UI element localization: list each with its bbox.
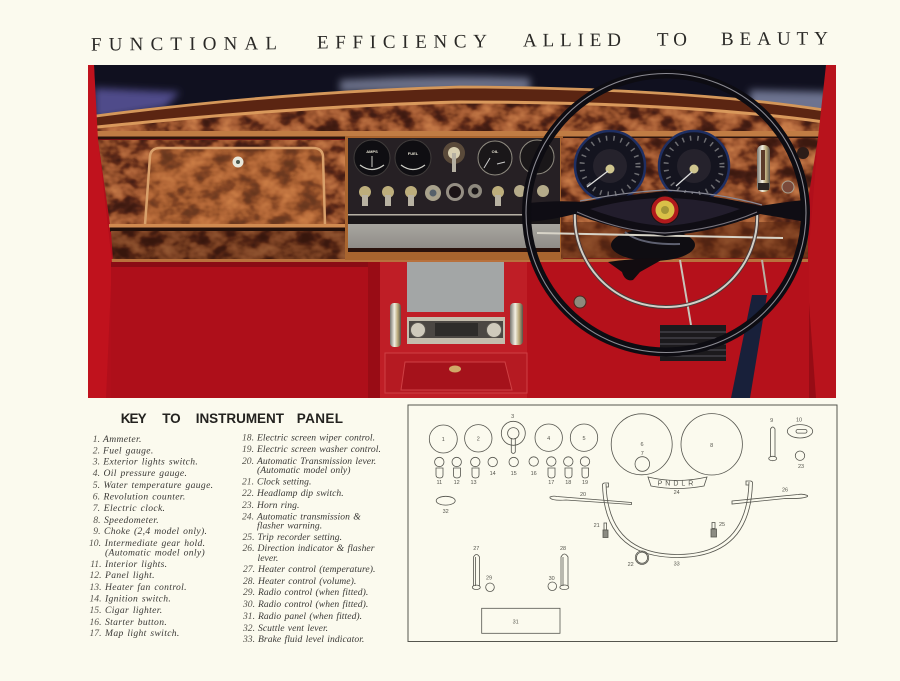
key list: column two: flasher warning. xyxy=(257,520,322,532)
lower dark gap xyxy=(110,228,348,232)
key list: column one: 6. xyxy=(93,492,100,502)
diagram numbers: 6 xyxy=(640,442,644,448)
radio knob 29 xyxy=(486,583,494,592)
key list: column two: Horn ring. xyxy=(256,500,299,511)
trip setting xyxy=(711,522,716,537)
key list: column one: Electric clock. xyxy=(103,503,165,514)
diagram numbers: 4 xyxy=(547,436,550,442)
key list: column one: 17. xyxy=(90,628,102,639)
right carpet xyxy=(800,263,809,398)
small gauges: FUEL xyxy=(408,151,419,156)
headlamp dip switch 22 xyxy=(635,551,649,564)
key heading: PANEL xyxy=(297,411,343,426)
key list: column one: Oil pressure gauge. xyxy=(104,468,187,479)
key list: column one: 14. xyxy=(90,594,102,604)
key list: column two: 27. xyxy=(243,564,255,575)
diagram numbers: 23 xyxy=(798,464,804,470)
key list: column two: Heater control (volume). xyxy=(257,576,356,587)
key list: column two: 21. xyxy=(242,476,254,488)
key list: column two: Clock setting. xyxy=(257,476,311,488)
key list: column one: Speedometer. xyxy=(104,515,159,526)
diagram numbers xyxy=(436,414,804,626)
small gauges: AMPS xyxy=(366,149,378,154)
valance shadow xyxy=(348,248,560,252)
key list: column one: Interior lights. xyxy=(104,559,167,570)
key list: column one: 10. xyxy=(89,538,101,549)
title: EFFICIENCY xyxy=(317,31,487,53)
key list: column one: 11. xyxy=(90,559,102,570)
upper wood band xyxy=(96,88,821,126)
revolution counter xyxy=(575,131,645,201)
clock setting 21 xyxy=(603,523,608,538)
key list: column two: 28. xyxy=(243,576,255,587)
key list: column one: 1. xyxy=(93,434,100,445)
lever 20 xyxy=(550,496,632,504)
title: TO xyxy=(657,29,687,51)
diagram numbers: 25 xyxy=(719,522,725,528)
key list: column two: Headlamp dip switch. xyxy=(256,488,344,499)
key list: column two: Direction indicator & flasher xyxy=(256,543,375,554)
transmission indicator 24: PNDLR xyxy=(658,480,696,488)
diagram numbers: 10 xyxy=(796,418,802,424)
key list: column two: 20. xyxy=(242,456,254,467)
glove box lock xyxy=(232,156,244,168)
diagram numbers: 28 xyxy=(560,546,566,552)
lower right wood xyxy=(561,222,808,259)
radio panel 31 xyxy=(482,608,560,633)
radio xyxy=(407,317,505,344)
indicator stalks xyxy=(537,233,783,238)
key list: column two: Electric screen wiper control. xyxy=(256,432,375,444)
speedometer xyxy=(659,131,729,201)
instrument frame xyxy=(345,136,563,260)
key list: column one: 2. xyxy=(93,446,100,456)
key list: column one: Revolution counter. xyxy=(102,492,186,502)
key list: column two: 32. xyxy=(242,623,255,634)
key list: column two: 25. xyxy=(242,532,254,543)
rail shadow xyxy=(97,136,820,140)
diagram numbers: 33 xyxy=(674,562,680,568)
key list: column one: 9. xyxy=(93,526,100,537)
diagram numbers: 14 xyxy=(490,471,496,477)
key list: column two: Radio control (when fitted). xyxy=(257,587,368,598)
diagram numbers: 5 xyxy=(582,436,586,442)
diagram numbers: 13 xyxy=(470,480,477,486)
key list: column one: Ignition switch. xyxy=(104,594,171,604)
transmission indicator 24 xyxy=(648,477,707,488)
small gauges: OIL xyxy=(492,149,499,154)
small gauges xyxy=(354,140,554,176)
glove box door xyxy=(145,146,327,226)
diagram numbers: 11 xyxy=(436,480,442,486)
pedal stem right xyxy=(762,260,767,293)
key heading: INSTRUMENT xyxy=(196,411,285,426)
key heading: TO xyxy=(162,411,181,426)
steering column xyxy=(608,229,695,280)
key list: column two: Electric screen washer control. xyxy=(256,444,381,455)
knob 25 xyxy=(795,451,805,460)
silver valance xyxy=(348,224,560,248)
key list: column two: Trip recorder setting. xyxy=(258,532,342,543)
radio knob 30 xyxy=(548,582,557,591)
key list: column two: 19. xyxy=(242,444,254,455)
key list: column one: 12. xyxy=(90,570,102,581)
key list: column one: Choke (2,4 model only). xyxy=(104,526,207,537)
instrument black panel xyxy=(348,138,560,216)
diagram numbers: 24 xyxy=(674,490,680,496)
diagram numbers: 9 xyxy=(770,418,773,424)
diagram numbers: 15 xyxy=(511,471,517,477)
lower wood strip xyxy=(109,224,347,228)
revolution counter, clock and speedometer dials xyxy=(611,414,742,475)
key list: column one: 4. xyxy=(93,468,100,479)
diagram numbers: 32 xyxy=(443,509,449,515)
lever 9 xyxy=(769,427,777,461)
carpet dark edge xyxy=(368,262,380,398)
key list: column one: 7. xyxy=(93,503,100,514)
knob 10 xyxy=(787,425,813,438)
right dash knob xyxy=(797,147,809,159)
diagram numbers: 8 xyxy=(710,443,713,449)
diagram numbers: 2 xyxy=(477,436,480,442)
key list: column one: 3. xyxy=(92,456,100,468)
diagram numbers: 20 xyxy=(580,492,586,498)
diagram numbers: 16 xyxy=(531,471,537,477)
key list: column one: Starter button. xyxy=(105,617,167,628)
key list: column two xyxy=(242,432,381,645)
title: FUNCTIONAL xyxy=(91,33,277,56)
key list: column two: Automatic transmission & xyxy=(256,512,361,522)
lower burl panel xyxy=(111,231,345,259)
wheel spokes and hub xyxy=(528,190,806,236)
heater lever 27 xyxy=(472,554,480,590)
diagram numbers: 3 xyxy=(511,414,514,420)
diagram numbers: 1 xyxy=(442,437,445,443)
diagram numbers: 26 xyxy=(782,488,788,494)
pedal stem left xyxy=(680,260,691,325)
console drawer xyxy=(385,353,527,393)
scuttle vent lever 32 xyxy=(436,496,455,505)
key list: column one: 8. xyxy=(93,515,100,526)
key list: column two: (Automatic model only) xyxy=(257,465,351,476)
title: BEAUTY xyxy=(721,28,828,50)
diagram numbers: 12 xyxy=(454,480,460,486)
steering wheel rim xyxy=(526,74,806,352)
diagram numbers: 22 xyxy=(628,562,634,568)
key list: column two: 29. xyxy=(243,587,255,598)
key list: column one: Map light switch. xyxy=(104,628,180,639)
console silver panel xyxy=(407,262,504,312)
key list: column two: Radio panel (when fitted). xyxy=(257,611,362,622)
chrome line xyxy=(348,214,522,216)
key list: column one: (Automatic model only) xyxy=(105,548,205,558)
key list: column two: 24. xyxy=(242,512,254,522)
upper wood light strip xyxy=(96,87,824,116)
key list: column one: 13. xyxy=(90,582,102,593)
floor button xyxy=(574,296,586,308)
diagram numbers: 18 xyxy=(565,480,571,486)
burl band xyxy=(98,104,820,131)
key list: column two: Radio control (when fitted). xyxy=(257,599,368,610)
diagram frame xyxy=(408,405,837,642)
right vent lever xyxy=(510,303,523,345)
switch row xyxy=(359,183,549,206)
windscreen xyxy=(94,65,826,114)
key list: column one: Panel light. xyxy=(104,570,155,581)
left burl panel xyxy=(96,138,348,228)
right door red xyxy=(808,65,826,262)
brake pedal xyxy=(660,325,726,361)
key list: column one: 5. xyxy=(93,480,100,491)
jaguar badge xyxy=(651,196,679,224)
carpet panel xyxy=(111,267,112,280)
key list: column two: 22. xyxy=(242,488,254,499)
right door shadow xyxy=(809,304,816,398)
key list: column two: lever. xyxy=(258,553,278,564)
key list: column two: Heater control (temperature). xyxy=(257,564,375,575)
diagram numbers: 17 xyxy=(548,480,554,486)
diagram numbers: 21 xyxy=(594,523,600,529)
instrument diagram panel xyxy=(408,405,837,642)
left carpet shadow xyxy=(88,65,112,398)
key list: column one: Intermediate gear hold. xyxy=(104,538,205,549)
key list: column two: 30. xyxy=(242,599,255,610)
right burl panel xyxy=(560,137,820,259)
lower edge strip xyxy=(111,259,811,262)
key list: column one: 15. xyxy=(90,605,102,616)
key list: column one: Cigar lighter. xyxy=(105,605,162,616)
diagram numbers: 27 xyxy=(473,546,479,552)
carpet top shadow xyxy=(111,262,378,267)
instrument lower label strip xyxy=(348,216,560,224)
key heading: KEY xyxy=(121,411,147,426)
title: ALLIED xyxy=(523,30,621,52)
gauges 1 to 5 xyxy=(429,421,598,454)
key list: column one: Fuel gauge. xyxy=(102,446,154,456)
accelerator strip xyxy=(731,295,767,398)
key list: column two: 31. xyxy=(242,611,255,622)
horn ring xyxy=(575,212,757,307)
dash rail xyxy=(97,131,820,137)
key list: column two: 26. xyxy=(242,543,254,554)
switch row 11 to 19 xyxy=(435,457,590,478)
key list: column one xyxy=(89,434,213,639)
key list: column two: Brake fluid level indicator. xyxy=(258,634,364,645)
red interior base xyxy=(88,65,836,398)
key heading xyxy=(121,411,343,426)
key list: column one: Exterior lights switch. xyxy=(102,456,198,468)
diagram numbers: 30 xyxy=(549,576,555,582)
left vent lever xyxy=(390,303,401,347)
key list: column two: 23. xyxy=(242,500,254,511)
key list: column one: Water temperature gauge. xyxy=(104,480,213,491)
console xyxy=(380,262,527,398)
diagram numbers: 7 xyxy=(641,451,644,457)
key list: column two: Automatic Transmission lever. xyxy=(256,456,376,467)
choke lever xyxy=(757,145,770,192)
title xyxy=(91,28,828,56)
diagram numbers: 29 xyxy=(486,576,492,582)
horn ring 23 xyxy=(602,481,752,558)
second wood strip xyxy=(97,102,824,127)
key list: column two: 18. xyxy=(242,432,254,444)
key list: column one: 16. xyxy=(90,617,102,628)
photograph: dashboard xyxy=(88,65,836,398)
key list: column one: Ammeter. xyxy=(102,434,142,445)
key list: column one: Heater fan control. xyxy=(104,582,187,593)
diagram numbers: 19 xyxy=(582,480,588,486)
lever 26 xyxy=(732,494,808,504)
small dash switch xyxy=(782,181,794,193)
diagram numbers: 31 xyxy=(513,620,519,626)
key list: column two: Scuttle vent lever. xyxy=(258,623,328,634)
heater lever 28 xyxy=(560,554,569,590)
key list: column two: 33. xyxy=(242,634,255,645)
